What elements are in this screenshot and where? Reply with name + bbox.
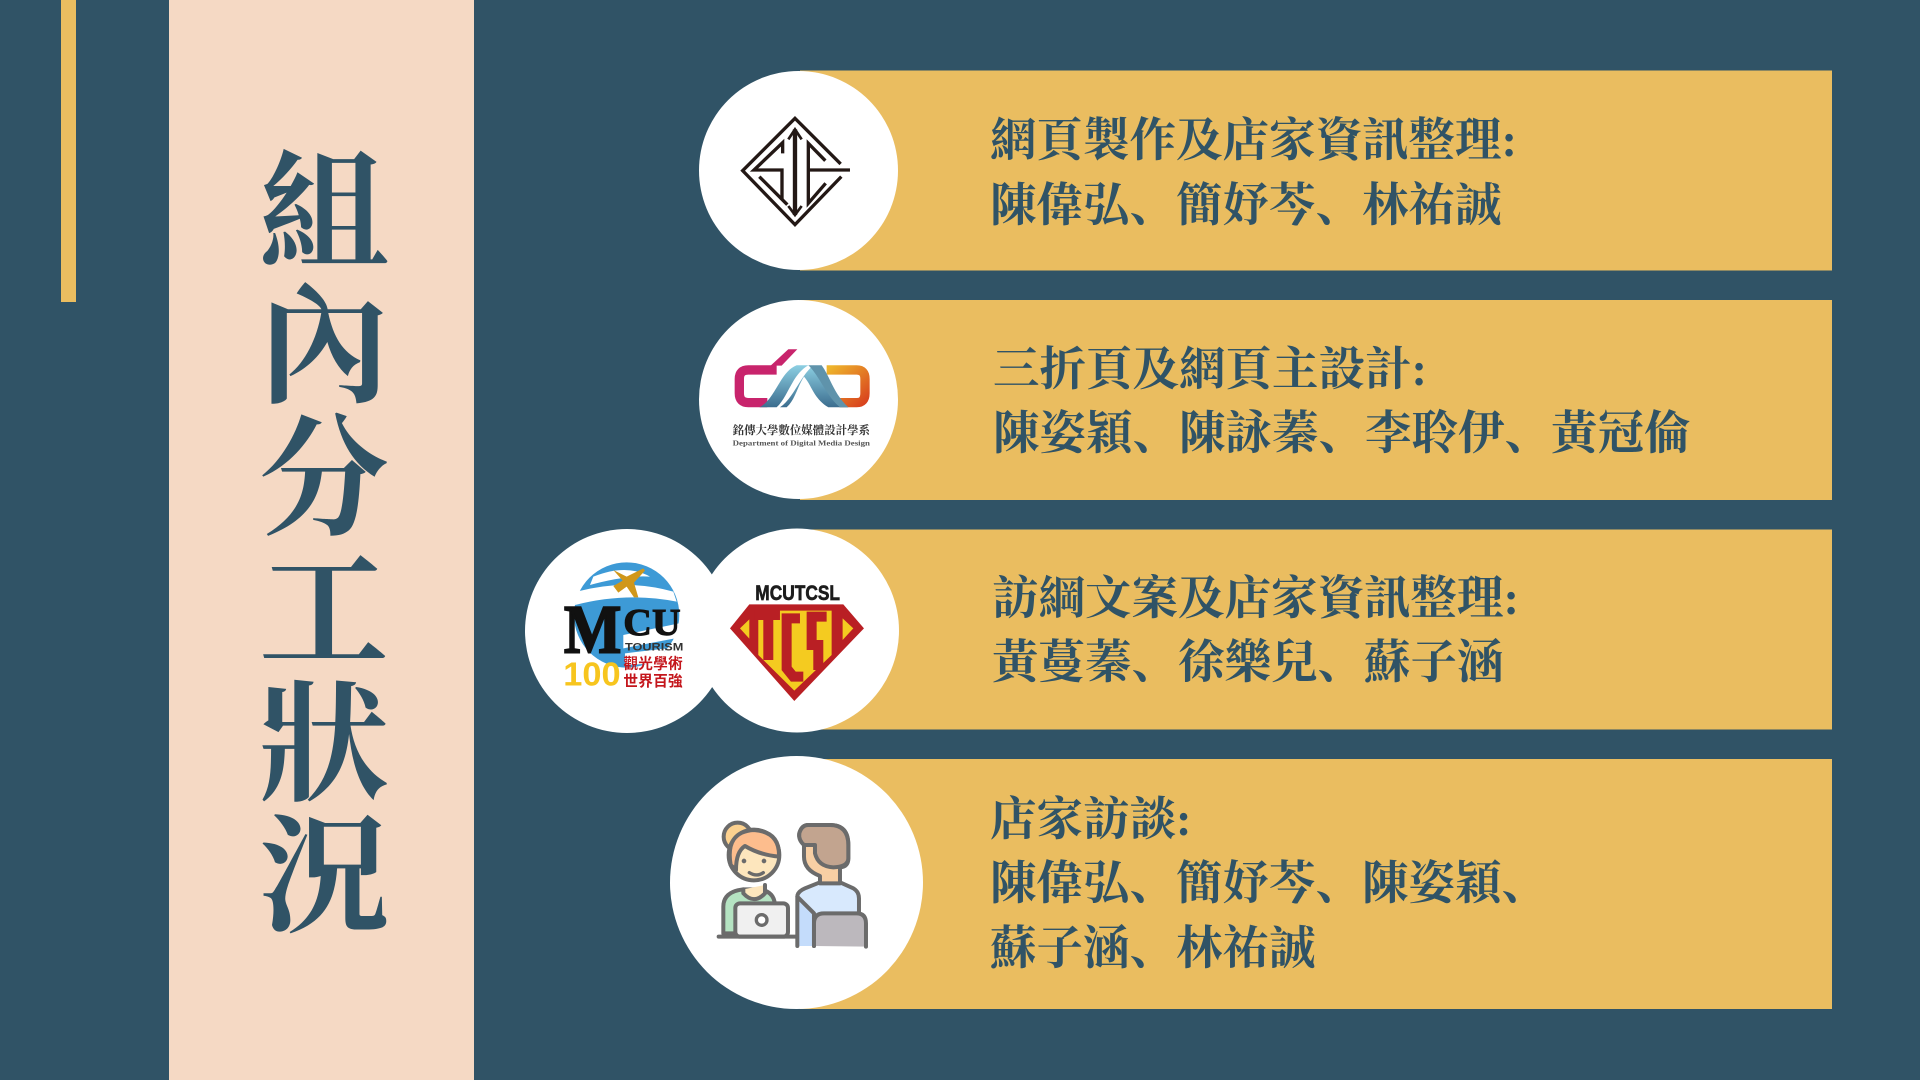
title: 狀 — [259, 641, 390, 828]
circle icon: MCU tourism logo — [525, 529, 729, 733]
bar 1 — [800, 70, 1832, 270]
text: row 3: 黃蔓蓁、徐樂兒、蘇子涵 — [992, 637, 1504, 689]
circle icon: MCU tourism logo: M — [564, 591, 621, 667]
row 4: store interviews — [670, 756, 1832, 1009]
circle icon: MCU tourism logo: TOURISM — [625, 642, 683, 654]
circle icon: DMD logo: 銘傳大學數位媒體設計學系 — [733, 422, 871, 438]
title: 工 — [259, 508, 389, 695]
circle icon: MCU tourism logo: 觀光學術 — [623, 654, 683, 672]
panel: title column — [169, 0, 474, 1080]
circle icon: MCU tourism logo: CU — [623, 602, 681, 644]
circle icon: TCSL shield logo — [695, 528, 899, 732]
title: 況 — [259, 773, 389, 960]
title: 組 — [259, 110, 389, 297]
text: row 1 — [990, 115, 1517, 232]
shield letters drawn as solid strokes — [755, 615, 827, 677]
circle icon: DMD logo — [699, 300, 898, 499]
title: 內 — [259, 243, 389, 430]
row 3: interview copy — [525, 528, 1832, 733]
text: row 4: 蘇子涵、林祐誠 — [990, 923, 1316, 975]
circle icon: MCU tourism logo: 100 — [563, 657, 621, 694]
text: row 2 — [993, 344, 1690, 460]
text: row 2: 三折頁及網頁主設計: — [993, 344, 1427, 396]
circle icon: SIE logo — [699, 71, 898, 270]
text: row 3 — [992, 573, 1519, 689]
bar 2 — [800, 300, 1832, 500]
text: row 3: 訪綱文案及店家資訊整理: — [992, 573, 1519, 625]
text: row 4 — [990, 794, 1548, 975]
row 2: leaflet and web design — [699, 300, 1832, 500]
circle icon: two people at laptop — [670, 756, 923, 1009]
circle icon: DMD logo: Department of Digital Media Design — [733, 438, 871, 447]
bar 4 — [800, 759, 1832, 1009]
text: row 4: 店家訪談: — [990, 794, 1192, 846]
text: row 1: 陳偉弘、簡妤芩、林祐誠 — [990, 180, 1502, 232]
accent strip — [61, 0, 76, 302]
text: row 4: 陳偉弘、簡妤芩、陳姿穎、 — [990, 858, 1548, 910]
title: 分 — [259, 375, 389, 562]
bar 3 — [800, 530, 1832, 730]
circle icon: MCU tourism logo: 世界百強 — [623, 673, 683, 690]
row 1: web production — [699, 70, 1832, 270]
text: row 1: 網頁製作及店家資訊整理: — [990, 115, 1517, 167]
circle icon: TCSL shield logo: MCUTCSL — [755, 581, 840, 605]
title — [259, 110, 390, 960]
text: row 2: 陳姿穎、陳詠蓁、李聆伊、黃冠倫 — [993, 408, 1690, 460]
